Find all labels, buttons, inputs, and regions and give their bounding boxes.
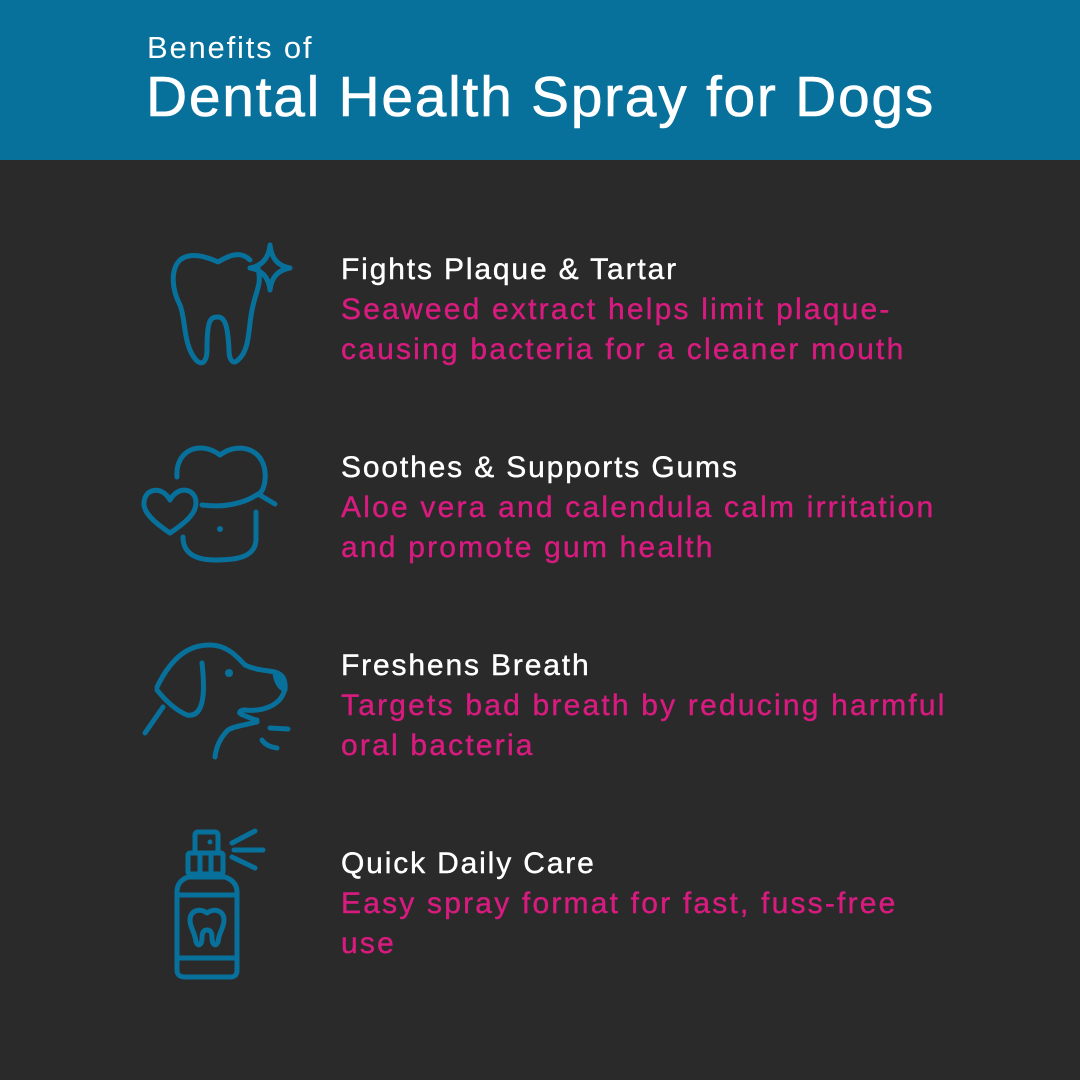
subtitle: Benefits of [147, 30, 313, 65]
benefit 2 text: Soothes & Supports Gums [341, 451, 739, 484]
icon: gums with heart [144, 448, 275, 560]
icon: tooth with sparkle [173, 245, 290, 363]
benefit 2 text [340, 451, 935, 564]
benefit 3 text: Targets bad breath by reducing harmful [341, 689, 947, 722]
icon: spray bottle [177, 831, 263, 977]
benefit 4 text: Easy spray format for fast, fuss-free [341, 887, 898, 920]
benefit 1 text: causing bacteria for a cleaner mouth [341, 333, 905, 366]
benefit 3 text [341, 649, 947, 762]
header banner [0, 0, 1080, 160]
benefit 1 text: Seaweed extract helps limit plaque- [341, 293, 892, 326]
benefit 4 text: use [341, 927, 396, 960]
title: Dental Health Spray for Dogs [146, 65, 935, 129]
benefit 2 text: Aloe vera and calendula calm irritation [341, 491, 935, 524]
benefit 2 text: and promote gum health [341, 531, 715, 564]
icon: dog head [145, 645, 288, 757]
benefit 4 text: Quick Daily Care [341, 847, 596, 880]
benefit 3 text: oral bacteria [341, 729, 535, 762]
benefit 1 text: Fights Plaque & Tartar [341, 253, 678, 286]
benefit 4 text [341, 847, 898, 960]
benefit 1 text [341, 253, 905, 366]
benefit 3 text: Freshens Breath [341, 649, 591, 682]
